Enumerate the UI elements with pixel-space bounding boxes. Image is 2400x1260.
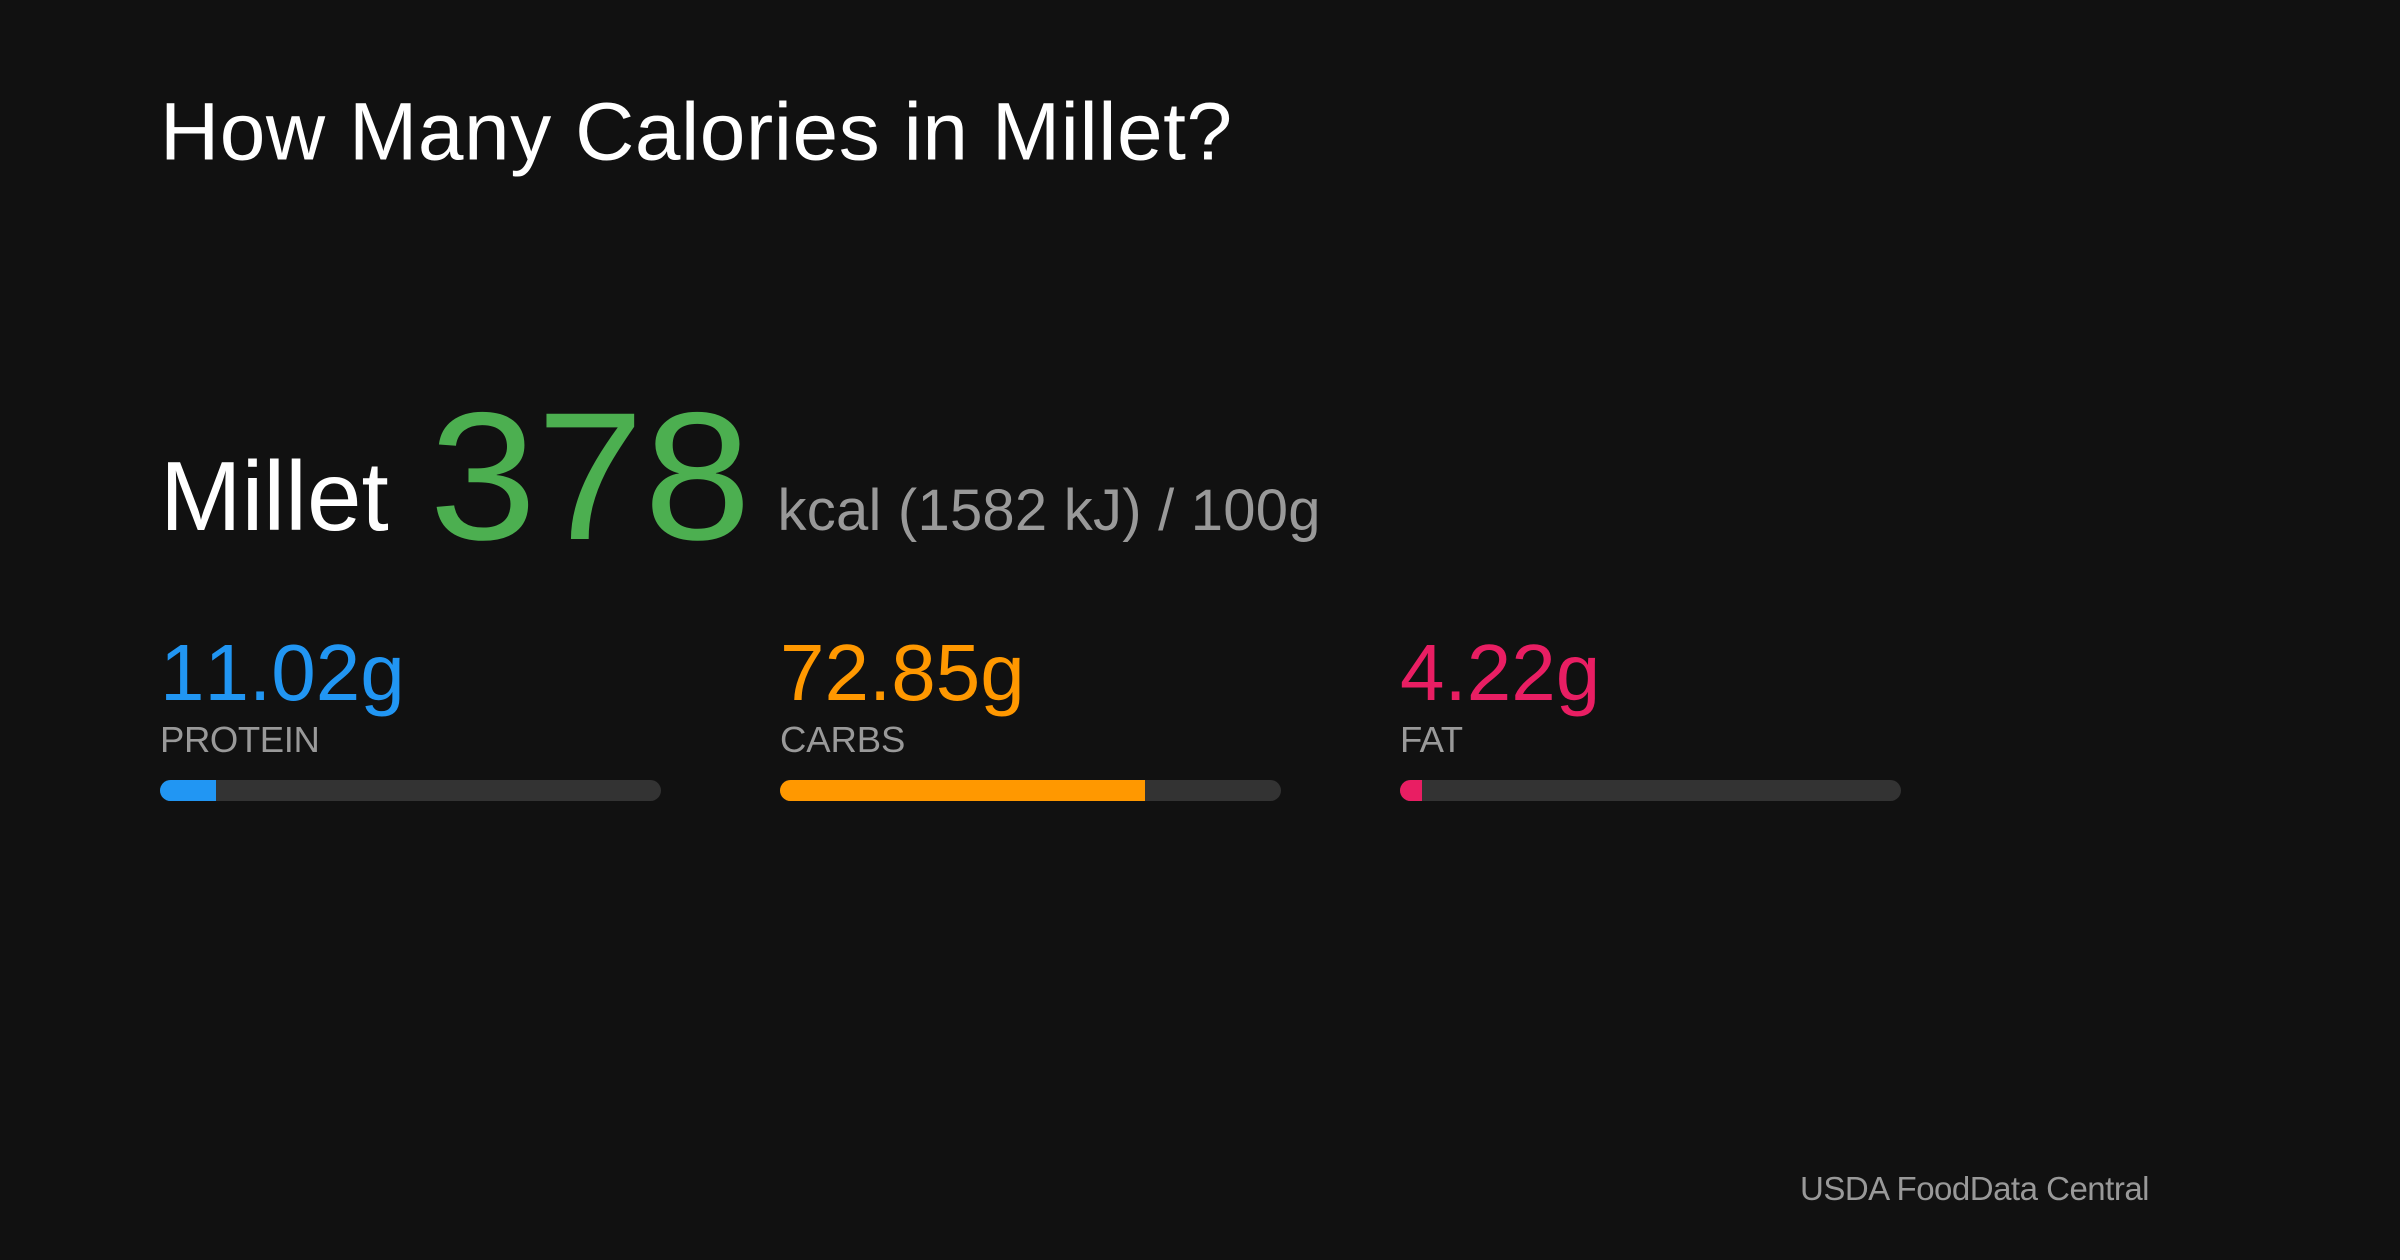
calorie unit: kcal (1582 kJ) / 100g bbox=[778, 478, 1321, 543]
panel: carbs bbox=[780, 628, 1281, 801]
carbs bar bbox=[780, 780, 1281, 801]
food name: Millet bbox=[160, 441, 389, 551]
carbs value: 72.85g bbox=[780, 628, 1025, 717]
panel: protein bbox=[160, 628, 661, 801]
protein label: PROTEIN bbox=[160, 719, 319, 760]
panel: fat bbox=[1400, 628, 1901, 801]
fat bar bbox=[1400, 780, 1901, 801]
protein value: 11.02g bbox=[160, 628, 405, 717]
fat value: 4.22g bbox=[1400, 628, 1600, 717]
source: USDA FoodData Central bbox=[1800, 1170, 2149, 1207]
carbs label: CARBS bbox=[780, 719, 905, 760]
protein bar bbox=[160, 780, 661, 801]
fat label: FAT bbox=[1400, 719, 1463, 760]
title: How Many Calories in Millet? bbox=[160, 86, 1233, 178]
calorie value: 378 bbox=[429, 374, 751, 578]
